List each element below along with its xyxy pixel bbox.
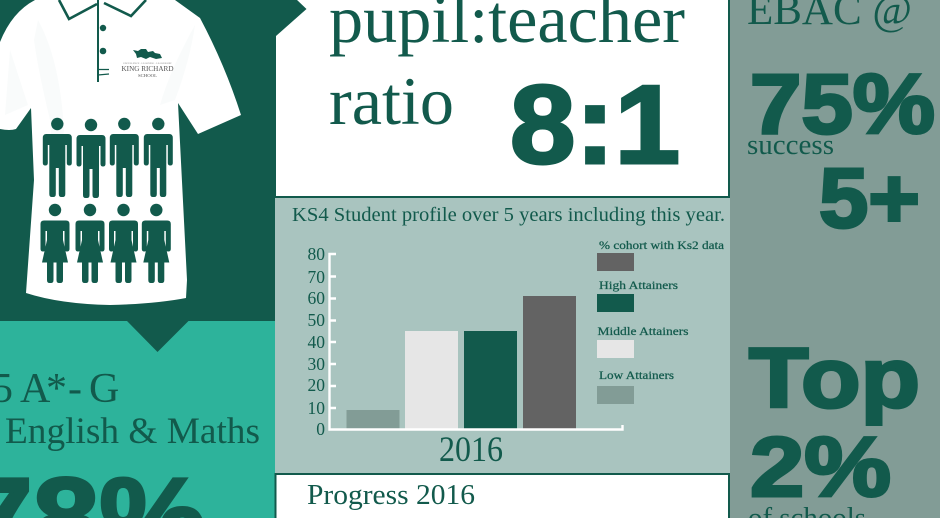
axis labels: 10	[308, 398, 325, 418]
panel: KS4 student profile chart	[275, 198, 730, 474]
axis labels: 60	[308, 288, 325, 308]
axis labels: 80	[308, 244, 325, 264]
axis labels: 30	[308, 354, 325, 374]
heading: chart title: KS4 Student profile over 5 years including this year.	[292, 204, 725, 226]
stat: 5+: 5+	[819, 151, 920, 245]
panel: headline statistics	[730, 0, 940, 518]
icon: male pupils	[43, 118, 173, 198]
axis labels: 70	[308, 267, 325, 287]
legend: Low Attainers	[599, 368, 674, 382]
legend	[597, 240, 724, 404]
stat: 75%: 75%	[750, 57, 935, 151]
legend: % cohort with Ks2 data	[599, 240, 724, 252]
arrow: pointing to pupil teacher ratio	[276, 0, 306, 36]
axis labels: 40	[308, 332, 325, 352]
icon: school logo	[122, 49, 174, 78]
stat: 2%: 2%	[750, 420, 891, 514]
icon: school logo: EXCELLENCE · LEARNING · LEADERSHIP	[123, 62, 172, 65]
arrow: pointing down from shirt panel	[126, 320, 190, 352]
x axis label: 2016	[439, 429, 503, 469]
heading: Progress 2016: Progress 2016	[307, 479, 475, 511]
icon: white polo shirt	[0, 0, 241, 305]
legend: Middle Attainers	[598, 324, 689, 338]
legend: High Attainers	[599, 278, 678, 292]
panel: GCSE results	[0, 320, 275, 518]
panel: pupil teacher ratio	[275, 0, 729, 197]
text: English and Maths: English & Maths	[5, 411, 260, 452]
text: success: success	[747, 129, 834, 161]
axis labels: 50	[308, 310, 325, 330]
axis labels: 0	[316, 419, 325, 439]
panel: progress 2016	[276, 474, 729, 518]
panel: school shirt and pupils	[0, 0, 276, 321]
axis labels: 20	[308, 375, 325, 395]
stat: Top: Top	[749, 331, 920, 425]
icon: school logo: KING RICHARD	[122, 65, 174, 73]
text: ratio: ratio	[329, 63, 454, 139]
bar chart	[308, 244, 622, 469]
axis labels	[308, 244, 325, 439]
icon: female pupils	[40, 204, 171, 283]
stat: 8:1: 8:1	[510, 63, 680, 187]
icon: school logo: SCHOOL	[138, 73, 157, 78]
bars	[346, 296, 576, 430]
